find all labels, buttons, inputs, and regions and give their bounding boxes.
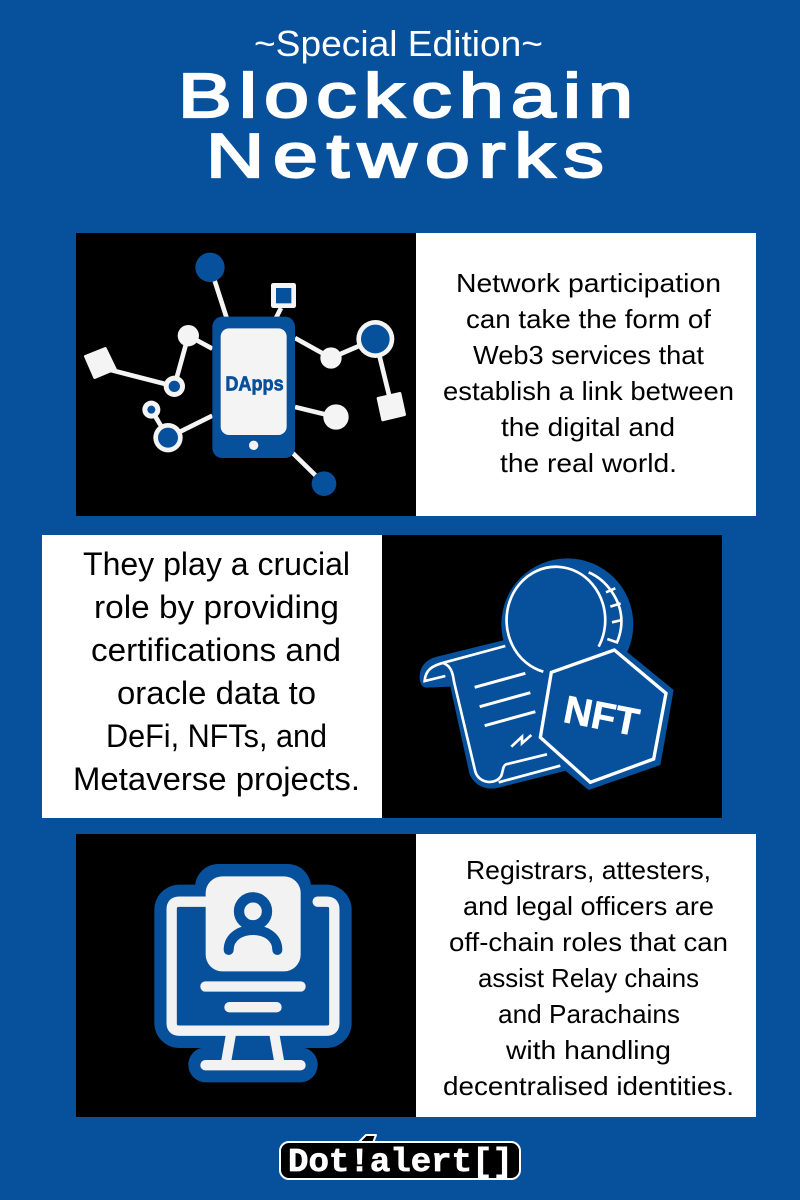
- icon: monitor with identity card: [154, 864, 352, 1082]
- identity text panel: and Parachains: [498, 999, 680, 1029]
- NFT text panel: role by providing: [94, 589, 339, 625]
- identity text panel: decentralised identities.: [443, 1071, 734, 1101]
- DApps text panel: Network participation: [456, 268, 721, 298]
- logo: Dot!alert[]: Dot!alert[]: [288, 1144, 513, 1181]
- DApps text panel: Web3 services that: [473, 340, 705, 370]
- DApps image background: [76, 233, 416, 516]
- title line 1: Blockchain: [178, 62, 633, 131]
- NFT text panel: certifications and: [91, 632, 341, 668]
- DApps text panel: the digital and: [501, 412, 675, 442]
- identity text panel: Registrars, attesters,: [466, 855, 711, 885]
- identity text panel: and legal officers are: [463, 891, 714, 921]
- NFT text panel: oracle data to: [117, 675, 316, 711]
- title line 2: Networks: [206, 122, 604, 191]
- DApps text panel: can take the form of: [466, 304, 712, 334]
- NFT text panel: [42, 535, 382, 818]
- NFT image background: [382, 535, 722, 818]
- identity text panel: [416, 834, 756, 1117]
- panel: identities: [76, 834, 756, 1117]
- icon: DApps phone network: DApps: [225, 373, 284, 395]
- panel: DApps: [76, 233, 756, 516]
- icon: NFT certificate and coin: NFT: [560, 688, 643, 745]
- NFT text panel: DeFi, NFTs, and: [106, 718, 327, 754]
- DApps text panel: [416, 233, 756, 516]
- DApps text panel: establish a link between: [443, 376, 734, 406]
- NFT text panel: They play a crucial: [83, 546, 350, 582]
- subtitle: ~Special Edition~: [254, 23, 543, 64]
- identity text panel: with handling: [505, 1035, 671, 1065]
- identity image background: [76, 834, 416, 1117]
- icon: NFT certificate and coin: [420, 558, 674, 790]
- identity text panel: assist Relay chains: [478, 963, 699, 993]
- icon: DApps phone network: [85, 253, 405, 496]
- identity text panel: off-chain roles that can: [449, 927, 728, 957]
- panel: NFT: [42, 535, 722, 818]
- DApps text panel: the real world.: [500, 448, 677, 478]
- NFT text panel: Metaverse projects.: [73, 761, 360, 797]
- title block: [178, 23, 633, 191]
